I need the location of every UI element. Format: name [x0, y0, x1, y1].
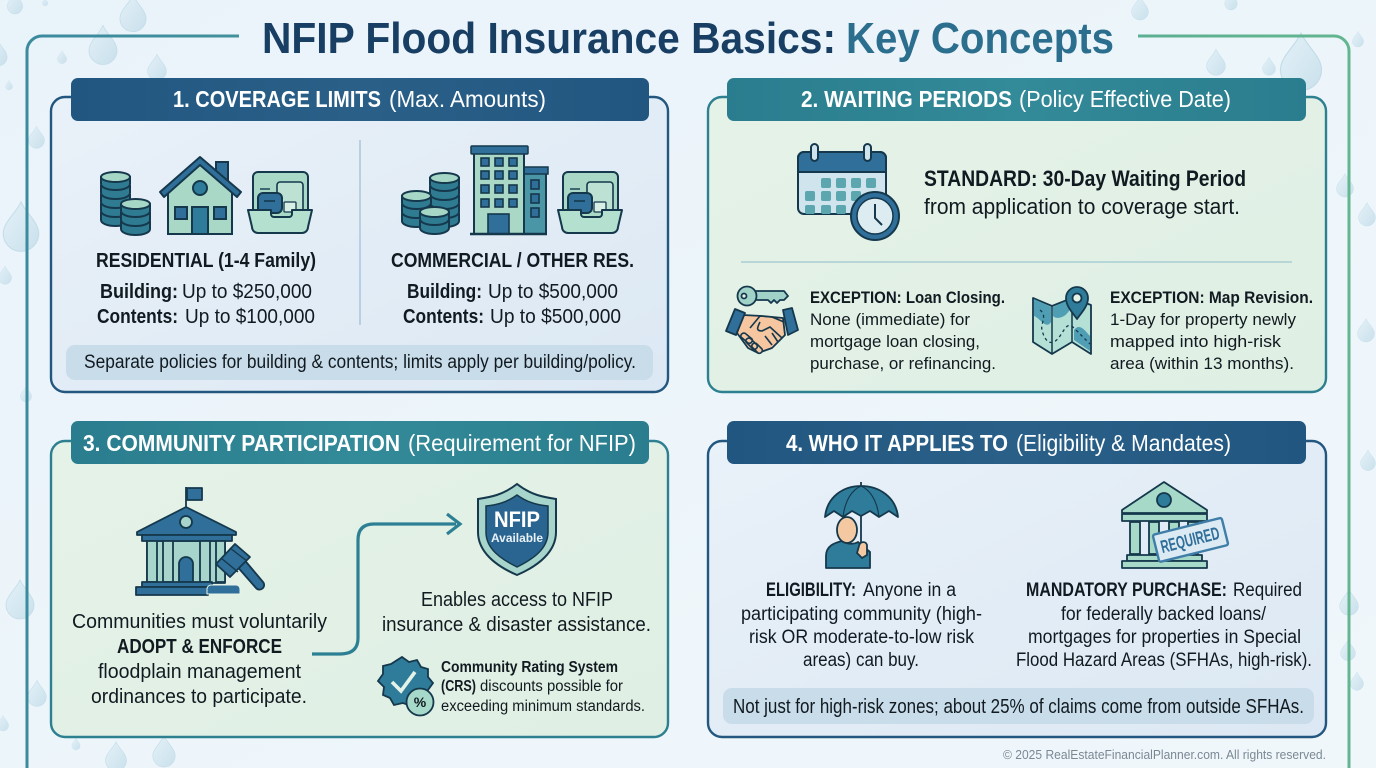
panel: community participation [51, 421, 668, 737]
text: exception loan closing: EXCEPTION: Loan Closing. [810, 288, 1005, 307]
text: community rating system: Community Rating System [441, 659, 618, 676]
icon: calendar and clock [798, 144, 899, 240]
text: mandatory purchase: Required [1233, 580, 1302, 601]
note: claims outside SFHAs [723, 688, 1314, 724]
text: commercial limits [391, 249, 634, 328]
header: waiting periods: 2. WAITING PERIODS [801, 86, 1012, 112]
icon: courthouse and gavel [136, 487, 264, 595]
divider [359, 140, 361, 325]
text: exception loan closing: purchase, or refinancing. [810, 354, 996, 373]
panel: who it applies to [708, 421, 1326, 737]
text: adopt and enforce: floodplain management [98, 660, 301, 683]
text: exception loan closing: mortgage loan closing, [810, 332, 980, 351]
note: separate policies: Separate policies for building & contents; limits apply per building/policy. [84, 352, 636, 373]
text: residential limits: Up to $250,000 [182, 280, 312, 303]
text: commercial limits: Contents: [403, 305, 484, 328]
text: exception map revision: EXCEPTION: Map Revision. [1110, 288, 1313, 307]
title: NFIP Flood Insurance Basics: [262, 14, 836, 63]
icon: bank with required stamp: REQUIRED [1158, 523, 1222, 557]
icon: NFIP shield [478, 484, 556, 575]
text: eligibility: participating community (high- [741, 604, 982, 625]
text: community rating system [441, 659, 645, 715]
text: adopt and enforce: ADOPT & ENFORCE [117, 635, 282, 658]
text: eligibility: risk OR moderate-to-low risk [749, 627, 974, 648]
header: who it applies to: 4. WHO IT APPLIES TO [786, 430, 1008, 456]
text: commercial limits: Building: [407, 280, 482, 303]
header: coverage limits: (Max. Amounts) [389, 86, 546, 112]
text: enables access: insurance & disaster assistance. [382, 613, 651, 636]
footer copyright: © 2025 RealEstateFinancialPlanner.com. All rights reserved. [1003, 747, 1326, 762]
icon: CRS badge: % [414, 694, 427, 710]
text: residential limits: RESIDENTIAL (1-4 Family) [96, 249, 316, 272]
text: adopt and enforce: ordinances to participate. [91, 685, 307, 708]
icon: residential coins, house and contents [101, 157, 312, 235]
text: standard waiting period [924, 166, 1246, 219]
text: residential limits: Building: [100, 280, 178, 303]
text: commercial limits: Up to $500,000 [488, 280, 618, 303]
header: waiting periods [727, 78, 1306, 121]
text: exception loan closing: None (immediate) for [810, 310, 970, 329]
text: mandatory purchase [1016, 580, 1312, 671]
icon: bank with required stamp [1122, 482, 1228, 568]
note: separate policies [66, 345, 653, 380]
header: community participation [71, 421, 649, 464]
text: standard waiting period: from application to coverage start. [924, 194, 1240, 219]
text: eligibility [741, 580, 982, 671]
text: exception map revision: 1-Day for property newly [1110, 310, 1296, 329]
text: exception map revision [1110, 288, 1313, 373]
text: eligibility: ELIGIBILITY: [766, 580, 856, 601]
text: eligibility: areas) can buy. [803, 650, 919, 671]
text: community rating system: (CRS) [441, 678, 476, 695]
text: adopt and enforce: Communities must voluntarily [72, 610, 328, 633]
icon: NFIP shield: NFIP [494, 507, 540, 532]
header: waiting periods: (Policy Effective Date) [1019, 86, 1231, 112]
text: residential limits: Up to $100,000 [185, 305, 315, 328]
header: who it applies to [727, 421, 1306, 464]
text: standard waiting period: STANDARD: 30-Day Waiting Period [924, 166, 1246, 191]
icon: person with umbrella [825, 482, 898, 568]
text: enables access: Enables access to NFIP [421, 588, 613, 611]
title: Key Concepts [846, 14, 1114, 63]
text: exception map revision: area (within 13 months). [1110, 354, 1294, 373]
text: residential limits [96, 249, 316, 328]
text: eligibility: Anyone in a [863, 580, 956, 601]
icon: commercial coins, building and contents [402, 146, 622, 234]
header: coverage limits: 1. COVERAGE LIMITS [173, 86, 381, 112]
header: community participation: 3. COMMUNITY PARTICIPATION [83, 430, 400, 456]
text: exception loan closing [810, 288, 1005, 373]
text: community rating system: exceeding minimum standards. [441, 698, 645, 715]
icon: NFIP shield: Available [491, 531, 543, 545]
text: mandatory purchase: for federally backed loans/ [1061, 604, 1267, 625]
panel: coverage limits [51, 78, 668, 392]
text: commercial limits: Up to $500,000 [490, 305, 621, 328]
header: coverage limits [71, 78, 649, 121]
text: residential limits: Contents: [97, 305, 178, 328]
icon: key and handshake [726, 286, 798, 353]
text: mandatory purchase: Flood Hazard Areas (SFHAs, high-risk). [1016, 650, 1312, 671]
text: community rating system: discounts possible for [480, 678, 623, 695]
text: adopt and enforce [72, 610, 328, 708]
arrow [312, 514, 460, 654]
text: mandatory purchase: MANDATORY PURCHASE: [1026, 580, 1227, 601]
text: commercial limits: COMMERCIAL / OTHER RES. [391, 249, 634, 272]
text: mandatory purchase: mortgages for properties in Special [1028, 627, 1301, 648]
panel: waiting periods [708, 78, 1326, 392]
text: enables access [382, 588, 651, 636]
icon: CRS badge [378, 657, 434, 716]
icon: map and pin [1033, 287, 1091, 354]
header: community participation: (Requirement for NFIP) [408, 430, 636, 456]
text: exception map revision: mapped into high-risk [1110, 332, 1282, 351]
header: who it applies to: (Eligibility & Mandates) [1016, 430, 1231, 456]
